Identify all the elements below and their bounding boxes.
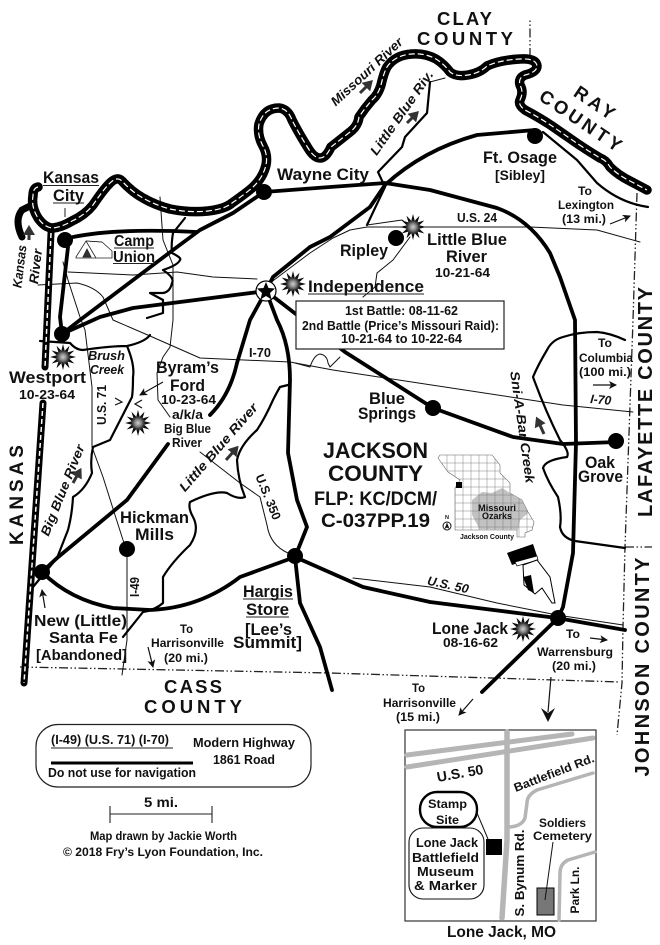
road labels	[95, 211, 612, 597]
inset map: Missouri: Jackson County	[460, 534, 514, 541]
river labels: Brush	[88, 348, 125, 363]
title: Jackson County	[314, 438, 438, 532]
museum marker	[486, 839, 502, 855]
road labels: U.S. 350	[253, 472, 283, 522]
river labels: Creek	[90, 362, 125, 377]
county boundary lines	[20, 20, 652, 735]
road labels: I-49	[128, 577, 142, 597]
Lexington note: To	[578, 184, 592, 198]
Lone Jack label	[432, 620, 509, 650]
Warrensburg note: Warrensburg	[537, 645, 613, 659]
Warrensburg note: To	[566, 627, 580, 641]
Lone Jack label: 08-16-62	[443, 635, 498, 650]
Sni-A-Bar area labels: Columbia	[579, 351, 633, 365]
icon: tent	[76, 241, 112, 258]
place labels north: River	[446, 247, 487, 266]
state line Kansas	[24, 233, 51, 683]
New (Little) Santa Fe label: Santa Fe	[49, 630, 118, 647]
Warrensburg note: (20 mi.)	[552, 659, 596, 673]
Blue Springs label: Blue	[369, 389, 405, 408]
callout: Independence battle dates	[296, 301, 504, 349]
soldiers cemetery: Cemetery	[533, 829, 592, 843]
Hickman Mills label: Hickman	[120, 508, 189, 527]
Sni-A-Bar area labels: Oak	[585, 454, 616, 472]
town markers	[34, 128, 624, 626]
Westport label	[9, 368, 86, 402]
soldiers cemetery: Soldiers	[539, 816, 586, 830]
museum callout: Battlefield	[412, 850, 479, 865]
Hargis Store label	[233, 583, 302, 652]
river labels: Missouri River	[328, 34, 406, 109]
Byram's Ford label: Byram’s	[156, 358, 219, 377]
place labels north: Ft. Osage	[483, 148, 557, 167]
county labels: LAFAYETTE COUNTY	[635, 286, 657, 517]
Camp Union label: Union	[113, 249, 155, 266]
road labels: U.S. 71	[95, 385, 109, 425]
Byram's Ford label: River	[172, 436, 202, 450]
icon: pointing hand	[507, 544, 555, 603]
scale bar: 5 mi.	[144, 794, 178, 810]
Warrensburg note	[537, 627, 613, 673]
inset map: Missouri: N	[445, 515, 449, 521]
county labels: COUNTY	[417, 28, 514, 49]
Hargis Store label: [Lee’s	[245, 621, 292, 639]
New (Little) Santa Fe label: New (Little)	[34, 613, 127, 630]
1861 roads	[42, 130, 648, 692]
inset map: Missouri: Ozarks	[482, 511, 512, 522]
Harrisonville 20 mi note: To	[180, 622, 193, 636]
credits: © 2018 Fry’s Lyon Foundation, Inc.	[63, 847, 263, 859]
river direction arrows	[29, 85, 544, 483]
Camp Union label: Camp	[114, 233, 154, 250]
Byram's Ford label: Ford	[170, 376, 205, 395]
river labels: Kansas	[9, 244, 30, 289]
place labels north: Wayne City	[277, 165, 370, 184]
legend panel: 1861 Road	[213, 753, 275, 767]
county labels: CASS	[164, 676, 222, 697]
New (Little) Santa Fe label: [Abandoned]	[36, 648, 127, 664]
inset road labels	[435, 751, 596, 916]
Westport label: 10-23-64	[19, 387, 76, 402]
place labels north: [Sibley]	[495, 167, 545, 183]
Harrisonville 20 mi note	[148, 622, 224, 667]
Lone Jack label: Lone Jack	[432, 620, 509, 638]
icon: Independence star marker	[256, 281, 276, 301]
place labels north: 10-21-64	[435, 265, 491, 280]
Hickman Mills label: Mills	[135, 525, 174, 544]
Blue Springs label	[358, 389, 416, 423]
legend panel: Modern Highway	[193, 736, 295, 750]
inset road labels: Battlefield Rd.	[512, 751, 596, 795]
road labels: I-70	[590, 392, 612, 408]
Byram's Ford label: 10-23-64	[161, 392, 217, 407]
Sni-A-Bar area labels: Grove	[578, 468, 623, 486]
title: Jackson County: FLP: KC/DCM/	[314, 489, 438, 510]
inset road labels: Park Ln.	[568, 866, 582, 914]
Harrisonville 15 mi note: Harrisonville	[383, 696, 456, 710]
county labels: COUNTY	[535, 85, 627, 156]
museum callout: Lone Jack	[416, 835, 479, 850]
callout: Independence battle dates: 10-21-64 to 10-22-64	[341, 332, 462, 346]
museum callout	[409, 828, 484, 899]
inset map: Missouri	[438, 454, 534, 540]
river labels: Little Blue Riv.	[367, 67, 436, 158]
arrow: to inset map	[541, 677, 555, 722]
river labels	[9, 34, 538, 538]
inset road labels: U.S. 50	[435, 761, 485, 785]
Harrisonville 15 mi note: To	[412, 681, 425, 695]
panel: Lone Jack inset map	[405, 730, 596, 921]
Harrisonville 20 mi note: (20 mi.)	[164, 651, 208, 665]
Hickman Mills label	[120, 508, 189, 544]
Byram's Ford label	[115, 358, 219, 450]
Kansas City label: City	[53, 186, 85, 205]
Lexington note: (13 mi.)	[562, 212, 606, 226]
callout: Independence battle dates: 2nd Battle (Price’s Missouri Raid):	[302, 319, 499, 333]
title: Jackson County: COUNTY	[328, 461, 423, 486]
Blue Springs label: Springs	[358, 404, 416, 423]
place labels north: Ripley	[340, 241, 388, 260]
stamp site callout: Stamp	[428, 797, 467, 811]
river labels: Big Blue River	[37, 441, 88, 538]
credits: Map drawn by Jackie Worth	[90, 831, 237, 843]
Harrisonville 15 mi note: (15 mi.)	[396, 710, 440, 724]
callout: Independence battle dates: 1st Battle: 08-11-62	[345, 304, 458, 318]
title: Jackson County: C-037PP.19	[321, 511, 430, 532]
Byram's Ford label: Big Blue	[164, 422, 211, 436]
inset caption: Lone Jack, MO	[447, 924, 556, 941]
road labels: U.S. 24	[457, 211, 497, 225]
scale bar	[110, 794, 212, 823]
legend panel	[36, 724, 311, 787]
road labels: I-70	[249, 346, 271, 360]
Lexington note	[558, 184, 630, 226]
place labels north: Little Blue	[427, 230, 507, 249]
Sni-A-Bar area labels: (100 mi.)	[579, 365, 631, 379]
county labels: JOHNSON COUNTY	[632, 557, 654, 776]
Sni-A-Bar area labels	[578, 336, 633, 486]
Kansas City label	[43, 168, 99, 217]
Sni-A-Bar area labels: To	[598, 336, 612, 350]
river labels: Sni-A-Bar Creek	[507, 370, 538, 485]
credits	[63, 831, 263, 859]
soldiers cemetery	[533, 816, 592, 915]
Camp Union label	[113, 233, 155, 266]
Missouri River	[18, 54, 647, 237]
county labels: KANSAS	[7, 445, 28, 545]
county labels: COUNTY	[144, 696, 243, 717]
Byram's Ford label: a/k/a	[172, 408, 204, 422]
Harrisonville 20 mi note: Harrisonville	[151, 636, 224, 650]
Harrisonville 15 mi note	[383, 681, 473, 724]
inset map: Missouri: Missouri	[478, 503, 516, 514]
county labels: RAY	[570, 81, 620, 124]
Hargis Store label: Hargis	[243, 583, 293, 601]
stamp site callout: Site	[436, 813, 459, 827]
legend panel: Do not use for navigation	[48, 766, 196, 780]
Hargis Store label: Store	[246, 601, 289, 619]
thin rivers and modern highways	[33, 78, 640, 675]
inset road labels: S. Bynum Rd.	[512, 830, 527, 916]
icon: battle bursts	[50, 214, 536, 642]
museum callout: Museum	[417, 864, 474, 879]
Westport label: Westport	[9, 368, 86, 387]
stamp site callout	[420, 792, 488, 839]
Hargis Store label: Summit]	[233, 634, 302, 652]
river labels: Little Blue River	[176, 399, 261, 495]
inset roads	[407, 732, 595, 920]
New (Little) Santa Fe label	[34, 590, 127, 664]
legend panel: (I-49) (U.S. 71) (I-70)	[51, 733, 169, 747]
museum callout: & Marker	[414, 878, 477, 893]
title: Jackson County: JACKSON	[323, 438, 428, 463]
river labels: River	[26, 247, 45, 285]
county labels: CLAY	[437, 8, 493, 29]
place labels north: Independence	[308, 277, 424, 296]
road labels: U.S. 50	[426, 574, 470, 596]
Lexington note: Lexington	[558, 198, 614, 212]
Kansas City label: Kansas	[43, 168, 99, 187]
place labels north	[277, 148, 557, 296]
